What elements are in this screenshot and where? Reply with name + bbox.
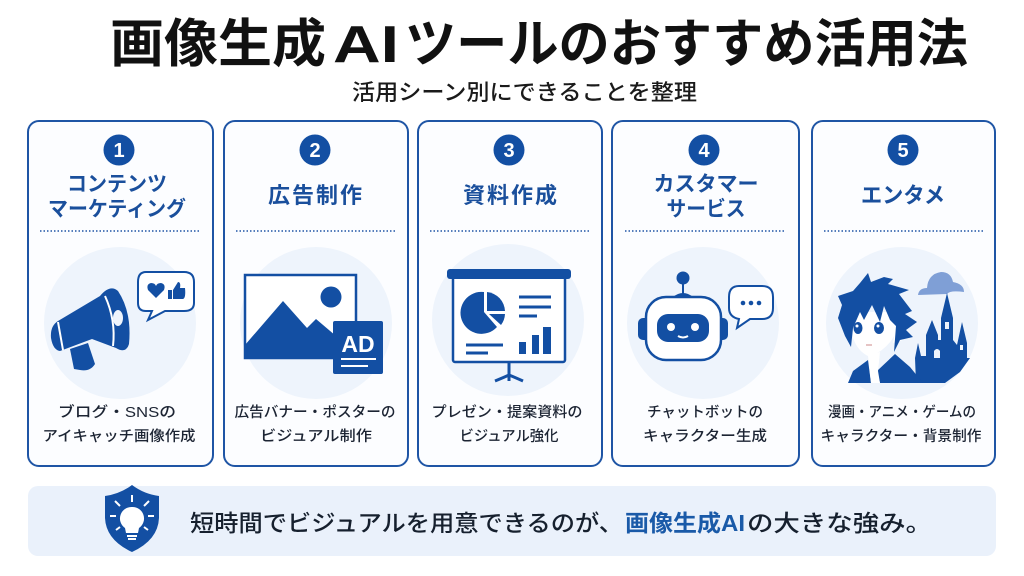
- heading 1: コンテンツ: [67, 173, 167, 196]
- description 3: ビジュアル強化: [460, 428, 559, 445]
- callout text: [190, 510, 932, 536]
- heading 1: [48, 173, 186, 221]
- heading 4: サービス: [666, 198, 746, 221]
- icon: presentation screen: [447, 269, 571, 381]
- panel: customer service: [612, 121, 799, 466]
- title: ツールのおすすめ活用法: [405, 16, 968, 74]
- description 4: チャットボットの: [647, 404, 763, 421]
- panel: content marketing: [28, 121, 213, 466]
- description 4: キャラクター生成: [643, 428, 767, 445]
- heading 3: 資料作成: [463, 183, 559, 208]
- description 2: 広告バナー・ポスターの: [234, 404, 396, 421]
- callout: [28, 485, 996, 556]
- description 1: [42, 403, 196, 445]
- heading 1: マーケティング: [48, 197, 186, 221]
- icon: robot with speech bubble: [638, 272, 773, 360]
- heading 4: [654, 173, 758, 221]
- number badge 2: 2: [309, 140, 321, 162]
- title: AI: [333, 16, 399, 74]
- description 5: キャラクター・背景制作: [820, 427, 982, 445]
- panel: documents: [418, 121, 602, 466]
- icon: speech bubble with heart and thumbs up: [138, 272, 194, 320]
- number badge 5: [888, 134, 918, 166]
- heading 5: エンタメ: [861, 183, 945, 208]
- title: 画像生成: [110, 16, 326, 74]
- callout text: 画像生成AI: [625, 510, 745, 536]
- callout text: の大きな強み。: [747, 510, 932, 536]
- subtitle: 活用シーン別にできることを整理: [352, 80, 697, 105]
- icon: image with mountains and AD tag: [245, 275, 383, 374]
- icon: megaphone: [51, 288, 130, 370]
- icon: shield with light bulb: [105, 485, 159, 552]
- number badge 4: [688, 134, 720, 166]
- number badge 3: 3: [503, 140, 515, 162]
- icon: image with mountains and AD tag: AD: [341, 331, 375, 357]
- number badge 1: 1: [113, 140, 125, 162]
- number badge 2: [300, 134, 330, 166]
- panel: entertainment: [812, 121, 995, 466]
- heading 2: 広告制作: [268, 183, 364, 208]
- description 2: ビジュアル制作: [260, 428, 372, 445]
- description 4: [643, 404, 767, 445]
- icon: anime character and castle: [838, 272, 970, 383]
- description 1: ブログ・SNSの: [58, 403, 176, 421]
- number badge 3: [494, 134, 524, 166]
- number badge 5: 5: [897, 140, 909, 162]
- description 5: 漫画・アニメ・ゲームの: [828, 404, 976, 421]
- description 3: プレゼン・提案資料の: [432, 404, 582, 421]
- description 3: [432, 404, 582, 445]
- heading 4: カスタマー: [654, 173, 758, 196]
- description 5: [820, 404, 982, 445]
- description 2: [234, 404, 396, 445]
- number badge 4: 4: [698, 140, 710, 162]
- number badge 1: [104, 134, 134, 166]
- title: [110, 16, 968, 74]
- callout text: 短時間でビジュアルを用意できるのが、: [190, 510, 623, 536]
- description 1: アイキャッチ画像作成: [42, 428, 196, 445]
- panel: ad production: [224, 121, 408, 466]
